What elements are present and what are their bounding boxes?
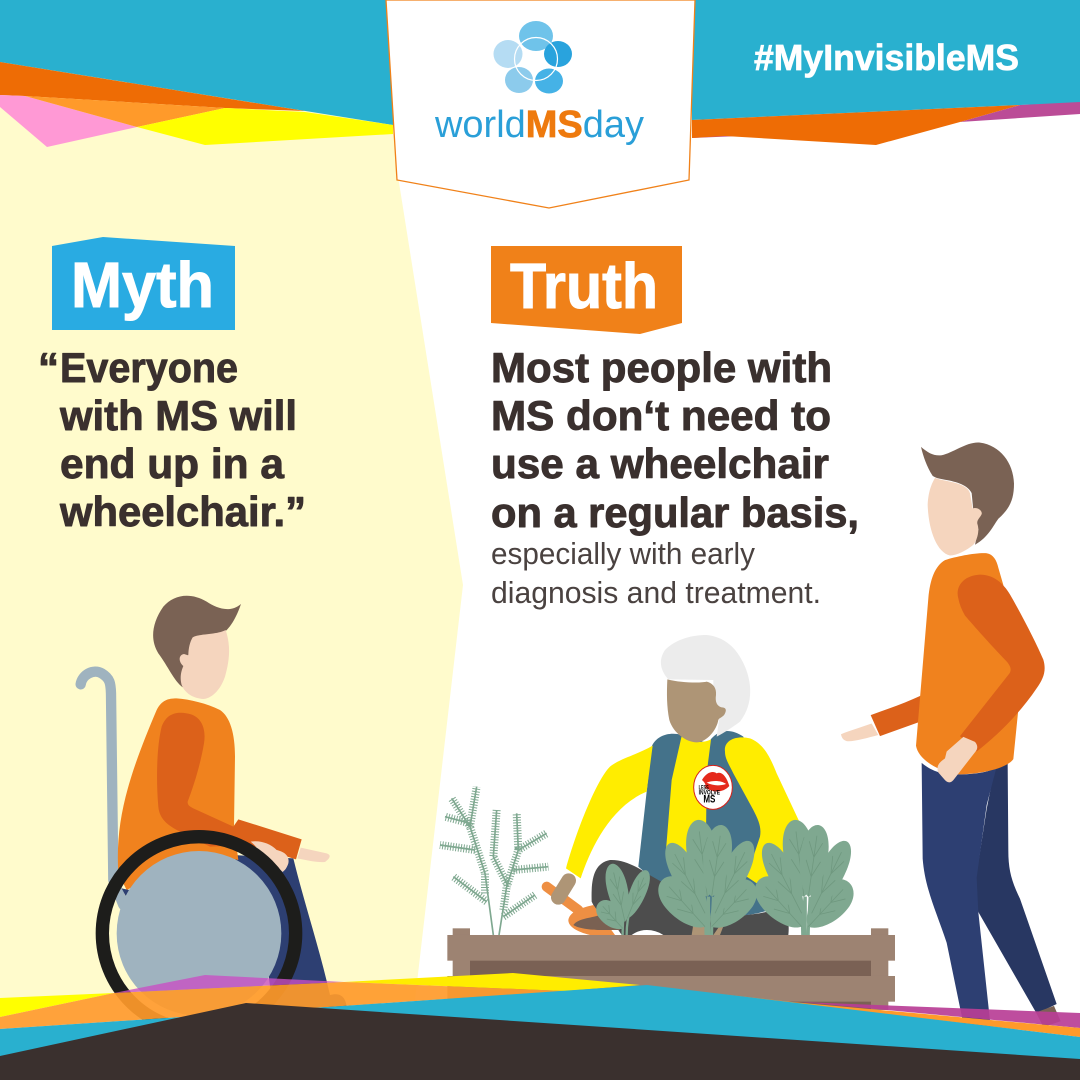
torso <box>916 553 1018 774</box>
jeans <box>233 855 347 1010</box>
small plant <box>591 862 654 935</box>
badge lip highlight <box>707 781 726 785</box>
fern plant <box>440 787 548 935</box>
fingers <box>297 848 330 862</box>
gardener vest <box>638 731 792 917</box>
far hand <box>841 724 878 741</box>
hand <box>558 881 569 897</box>
crate <box>447 928 895 1010</box>
back leg <box>976 762 1057 1014</box>
myth badge <box>52 237 235 330</box>
wheel tyre <box>102 837 296 1030</box>
wheelchair push handle <box>81 672 123 905</box>
truth badge: Truth <box>510 250 658 322</box>
myth statement <box>38 344 306 535</box>
back shoe <box>1036 1006 1061 1027</box>
front leg <box>922 763 997 1027</box>
myth statement: end up in a <box>60 440 285 487</box>
truth statement: Most people with <box>491 344 832 391</box>
near arm <box>958 575 1045 751</box>
truth statement: diagnosis and treatment. <box>491 575 821 610</box>
truth statement: on a regular basis, <box>491 489 859 536</box>
top left ribbon <box>0 0 393 147</box>
myth statement: with MS will <box>59 392 297 439</box>
logo wordmark: worldMSday <box>434 104 644 146</box>
torso <box>118 698 238 890</box>
trousers <box>592 860 789 935</box>
bottom ribbon <box>0 973 1080 1080</box>
yellow shirt front <box>666 736 717 890</box>
near hand <box>937 737 977 782</box>
gardener face <box>667 679 726 742</box>
feet <box>692 913 728 935</box>
myth statement: wheelchair.” <box>59 488 306 535</box>
soil <box>573 915 620 930</box>
truth statement: use a wheelchair <box>491 440 829 487</box>
center plant <box>650 818 765 938</box>
badge text: MS <box>703 794 716 806</box>
right plant <box>747 818 861 938</box>
white hair <box>661 635 750 737</box>
face and ear <box>928 478 982 556</box>
myth badge: Myth <box>71 249 214 321</box>
truth statement <box>491 344 859 610</box>
badge text: LESS <box>699 785 709 791</box>
face and ear <box>180 630 229 699</box>
hair <box>153 596 241 687</box>
trowel scoop <box>568 905 615 935</box>
arm <box>157 713 302 859</box>
wheel disc <box>117 851 281 1016</box>
truth statement: especially with early <box>491 536 755 571</box>
illustration: man in wheelchair <box>81 596 347 1030</box>
hair <box>921 443 1014 545</box>
hashtag: #MyInvisibleMS <box>754 37 1019 78</box>
hand on knee <box>251 841 289 872</box>
badge <box>694 765 732 809</box>
trowel handle <box>547 887 578 910</box>
badge text: INVOLVE <box>699 790 720 797</box>
logo banner <box>386 0 695 208</box>
illustration: gardener with crate and plants <box>440 635 895 1010</box>
yellow arm right <box>725 737 802 887</box>
myth statement: Everyone <box>60 344 238 391</box>
top right ribbon <box>692 0 1080 145</box>
logo emblem: five petals <box>494 21 572 94</box>
far arm <box>871 695 922 736</box>
badge lips <box>702 772 729 791</box>
myth statement: “ <box>38 344 59 391</box>
truth statement: MS don‘t need to <box>491 392 831 439</box>
yellow arm left <box>566 742 660 878</box>
truth badge <box>491 246 682 334</box>
panel: cream myth background <box>0 60 463 1000</box>
illustration: standing man <box>841 443 1061 1027</box>
